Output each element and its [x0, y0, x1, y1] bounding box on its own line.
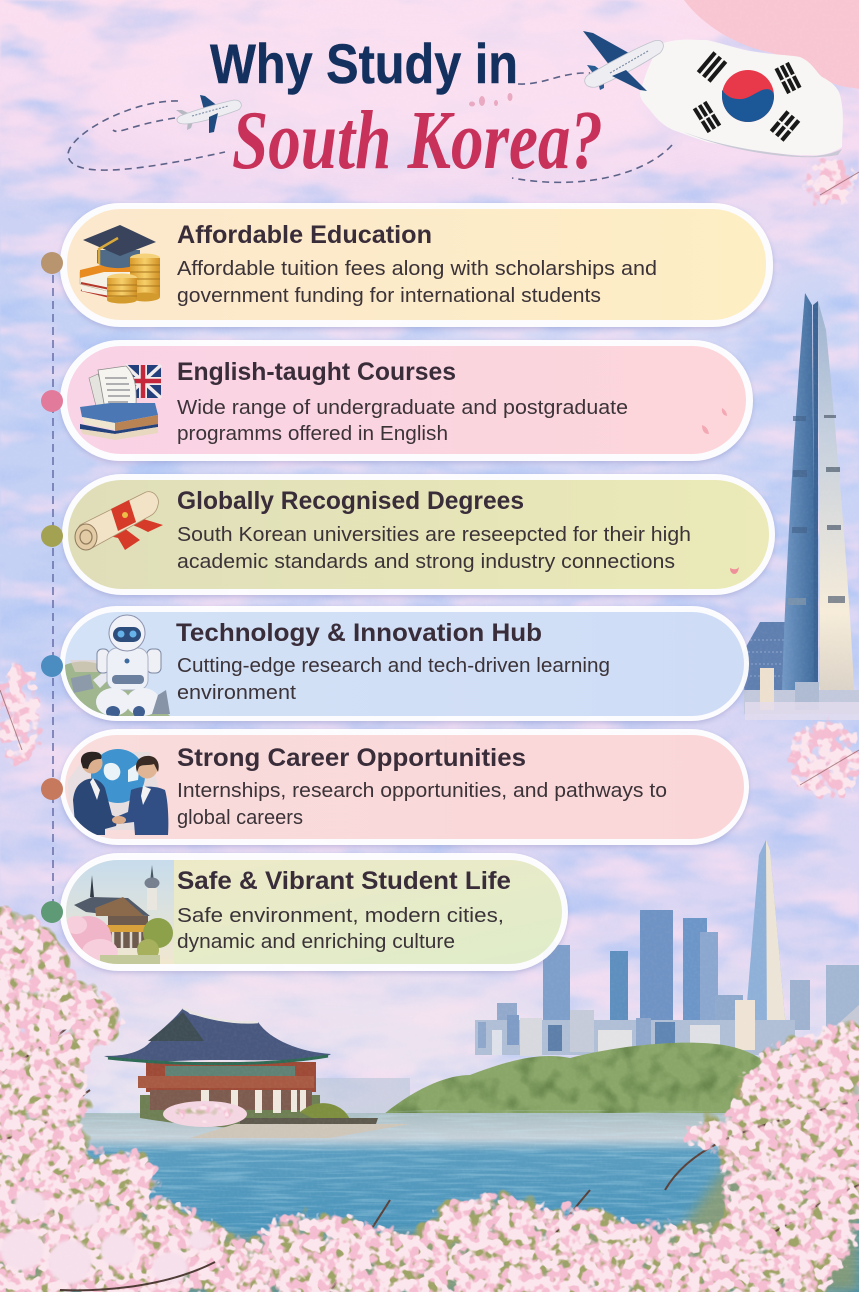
heading: Technology & Innovation Hub	[176, 619, 542, 647]
description: environment	[177, 682, 296, 704]
description: Affordable tuition fees along with scholarships and	[177, 258, 657, 280]
timeline dot 4	[41, 655, 63, 677]
heading: English-taught Courses	[177, 358, 456, 386]
icon: large airplane	[583, 31, 663, 91]
icon: businessmen shaking hands with globe	[68, 749, 168, 835]
flight path, right	[512, 73, 672, 182]
panel: Safe & Vibrant Student Life	[60, 853, 568, 971]
description: Wide range of undergraduate and postgraduate	[177, 397, 628, 419]
panel: Affordable Education	[60, 203, 773, 327]
description: programms offered in English	[177, 423, 448, 445]
title: Why Study in: Why Study in	[210, 32, 518, 95]
timeline dot 5	[41, 778, 63, 800]
petal	[730, 567, 739, 574]
description: global careers	[177, 807, 303, 829]
petals	[702, 408, 727, 434]
icon: robot	[65, 615, 170, 718]
description: Safe environment, modern cities,	[177, 905, 504, 927]
blossoms, upper edges	[0, 150, 859, 808]
description: Internships, research opportunities, and pathways to	[177, 780, 667, 802]
description: dynamic and enriching culture	[177, 931, 455, 953]
timeline dot 2	[41, 390, 63, 412]
timeline dashed line	[52, 275, 54, 902]
heading: Strong Career Opportunities	[177, 744, 526, 772]
icon: diploma scroll	[75, 492, 163, 550]
title: South Korea?: South Korea?	[232, 94, 603, 187]
petals near title	[469, 93, 512, 106]
Lotte World Tower and skyline, upper right	[742, 293, 859, 720]
icon: palace and Seoul tower scene	[64, 860, 174, 965]
heading: Safe & Vibrant Student Life	[177, 867, 511, 895]
palace	[104, 1008, 410, 1138]
heading: Globally Recognised Degrees	[177, 487, 524, 515]
icon: small airplane	[176, 95, 241, 133]
timeline dot 1	[41, 252, 63, 274]
description: government funding for international students	[177, 285, 601, 307]
flight path, left loop	[68, 101, 225, 170]
icon: Korean flag	[640, 40, 843, 157]
heading: Affordable Education	[177, 221, 432, 249]
cherry blossoms, bottom	[0, 900, 859, 1292]
description: Cutting-edge research and tech-driven learning	[177, 655, 610, 677]
water	[0, 1113, 859, 1292]
panel: Strong Career Opportunities	[60, 729, 749, 845]
description: South Korean universities are reseepcted for their high	[177, 524, 691, 546]
icon: books, papers and UK flag	[80, 365, 161, 440]
panel: Technology & Innovation Hub	[60, 606, 749, 721]
panel: Globally Recognised Degrees	[62, 474, 775, 595]
panel: English-taught Courses	[60, 340, 753, 461]
timeline dot 6	[41, 901, 63, 923]
icon: graduation cap, books and coins	[80, 225, 160, 304]
skyline, lower	[300, 840, 859, 1114]
description: academic standards and strong industry connections	[177, 551, 675, 573]
pink corner patch	[684, 0, 859, 89]
green hill	[384, 1043, 800, 1114]
timeline dot 3	[41, 525, 63, 547]
